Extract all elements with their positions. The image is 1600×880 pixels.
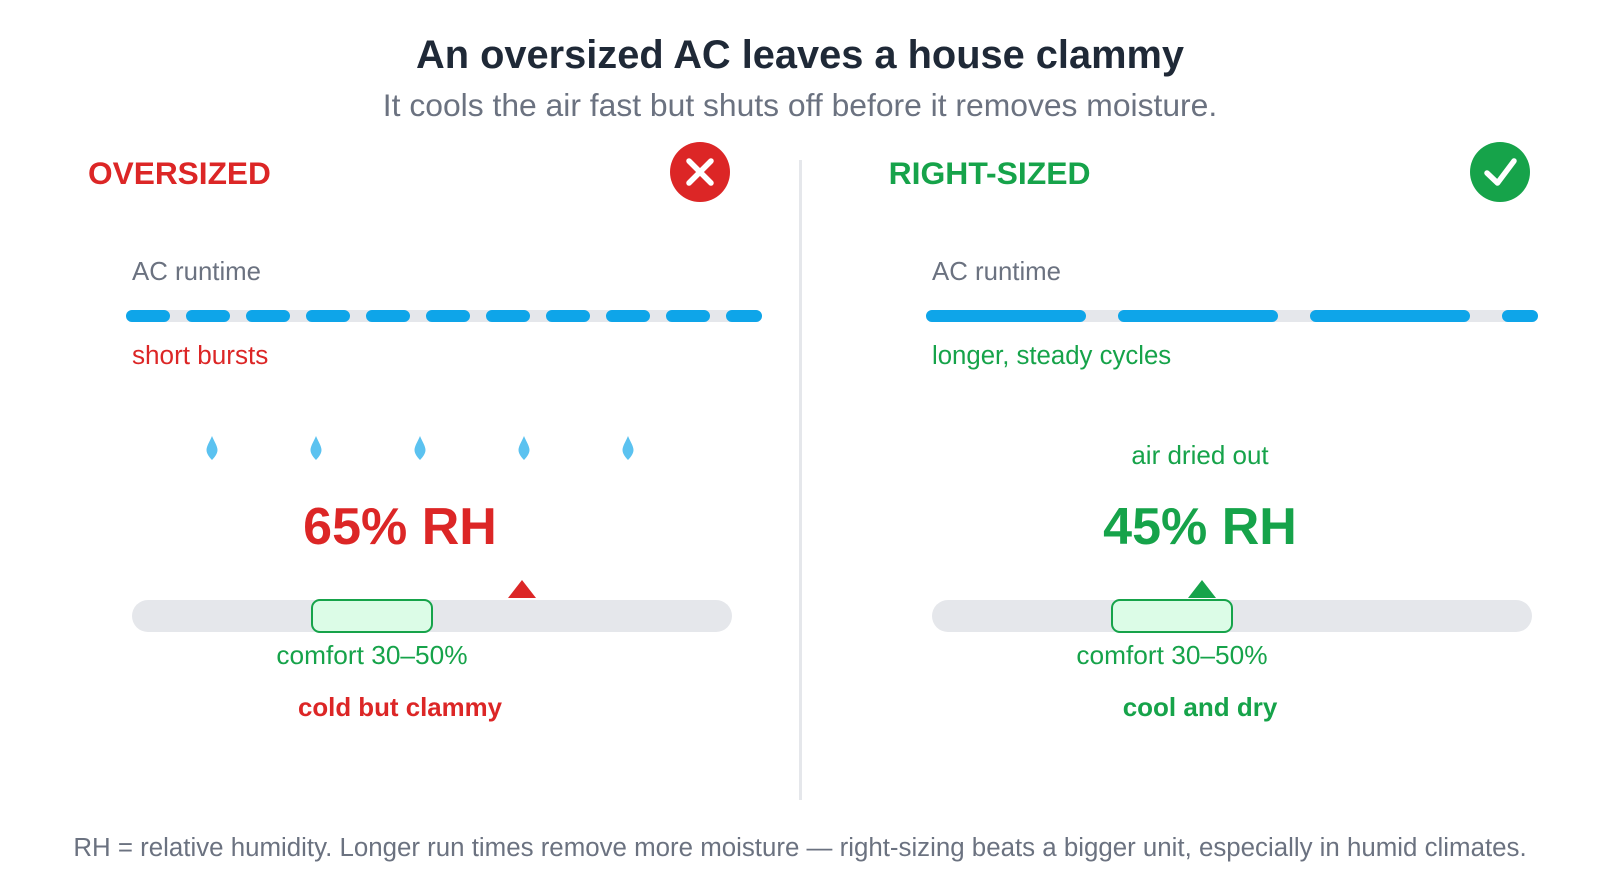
value: 65% RH: 65% RH xyxy=(303,498,497,556)
panel: right-sized xyxy=(889,142,1532,722)
runtime bar: longer cycles xyxy=(932,310,1532,322)
title: An oversized AC leaves a house clammy xyxy=(416,33,1184,77)
humidity scale: right-sized xyxy=(932,580,1532,632)
verdict: cold but clammy: cold but clammy xyxy=(298,694,503,722)
verdict: cool and dry: cool and dry xyxy=(1123,692,1278,722)
runtime bar: short bursts xyxy=(132,310,756,322)
heading: right-sized: RIGHT-SIZED xyxy=(889,155,1091,191)
icons: moisture drops xyxy=(206,436,634,460)
footnote: RH = relative humidity. Longer run times remove more moisture — right-sizing beats a bigger unit, especially in humid climates. xyxy=(73,834,1527,862)
value: 45% RH: 45% RH xyxy=(1103,498,1297,556)
label: comfort range: comfort 30–50% xyxy=(276,640,468,670)
heading: oversized: OVERSIZED xyxy=(88,155,271,191)
caption: air dried out: air dried out xyxy=(1131,440,1269,470)
panel: oversized xyxy=(88,142,756,722)
humidity scale: oversized xyxy=(132,580,732,632)
label: comfort range: comfort 30–50% xyxy=(1076,640,1268,670)
icon: green check xyxy=(1470,142,1530,202)
caption: short bursts: short bursts xyxy=(132,340,268,370)
label: AC runtime: AC runtime xyxy=(132,258,261,286)
subtitle: It cools the air fast but shuts off before it removes moisture. xyxy=(383,87,1217,123)
label: AC runtime: AC runtime xyxy=(932,258,1061,286)
caption: longer cycles: longer, steady cycles xyxy=(932,342,1171,370)
icon: red cross xyxy=(670,142,730,202)
